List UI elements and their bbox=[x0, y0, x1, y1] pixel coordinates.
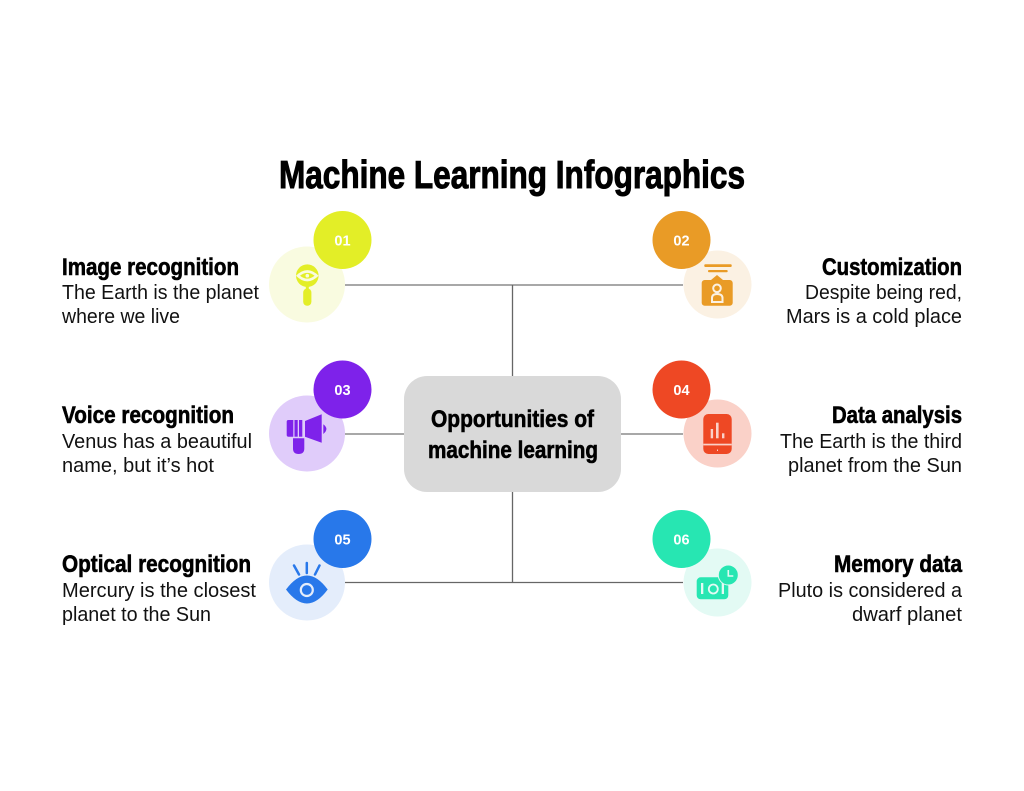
badge 03: 03 bbox=[334, 383, 351, 399]
panel: image recognition text: Image recognition bbox=[62, 254, 239, 281]
panel: voice recognition text: Voice recognition bbox=[62, 402, 234, 429]
panel: customization text bbox=[786, 254, 962, 328]
panel: customization text: Mars is a cold place bbox=[786, 306, 962, 328]
badge 04 bbox=[652, 360, 710, 418]
badge 06: 06 bbox=[673, 532, 690, 548]
icon: megaphone bbox=[269, 396, 345, 472]
badge 03 bbox=[314, 360, 372, 418]
panel: memory data text: dwarf planet bbox=[852, 604, 962, 626]
central box: opportunities: machine learning bbox=[428, 437, 598, 464]
panel: data analysis text: planet from the Sun bbox=[788, 455, 962, 477]
panel: image recognition text bbox=[61, 254, 259, 328]
central box: opportunities: Opportunities of bbox=[431, 406, 595, 433]
badge 05 bbox=[314, 510, 372, 568]
icon: eye bbox=[269, 544, 345, 620]
badge 06 bbox=[652, 510, 710, 568]
badge 04: 04 bbox=[673, 383, 690, 399]
central box: opportunities bbox=[404, 376, 621, 492]
panel: image recognition text: where we live bbox=[61, 306, 180, 328]
panel: data analysis text bbox=[780, 402, 962, 477]
panel: memory data text: Pluto is considered a bbox=[778, 580, 963, 602]
badge 05: 05 bbox=[334, 532, 351, 548]
panel: optical recognition text: Optical recognition bbox=[62, 551, 251, 578]
icon: phone with bars bbox=[684, 400, 752, 468]
icon: id badge bbox=[684, 250, 752, 318]
panel: optical recognition text: Mercury is the closest bbox=[62, 580, 256, 602]
badge 02: 02 bbox=[673, 234, 690, 250]
panel: optical recognition text bbox=[62, 551, 256, 626]
panel: customization text: Despite being red, bbox=[805, 282, 962, 304]
icon: magnifier with eye bbox=[269, 246, 345, 322]
panel: voice recognition text: Venus has a beautiful bbox=[62, 431, 252, 453]
icon: memory with clock bbox=[684, 548, 752, 616]
panel: image recognition text: The Earth is the planet bbox=[62, 282, 259, 304]
badge 01: 01 bbox=[334, 234, 351, 250]
connector lines bbox=[345, 285, 683, 582]
panel: voice recognition text: name, but it’s hot bbox=[62, 455, 214, 477]
panel: data analysis text: Data analysis bbox=[832, 402, 962, 429]
panel: memory data text bbox=[778, 551, 963, 626]
panel: optical recognition text: planet to the Sun bbox=[62, 604, 211, 626]
badge 02 bbox=[652, 211, 710, 269]
panel: voice recognition text bbox=[62, 402, 252, 477]
title: Machine Learning Infographics bbox=[279, 154, 745, 197]
badge 01 bbox=[314, 211, 372, 269]
panel: memory data text: Memory data bbox=[834, 551, 963, 578]
panel: customization text: Customization bbox=[822, 254, 962, 281]
panel: data analysis text: The Earth is the third bbox=[780, 431, 962, 453]
